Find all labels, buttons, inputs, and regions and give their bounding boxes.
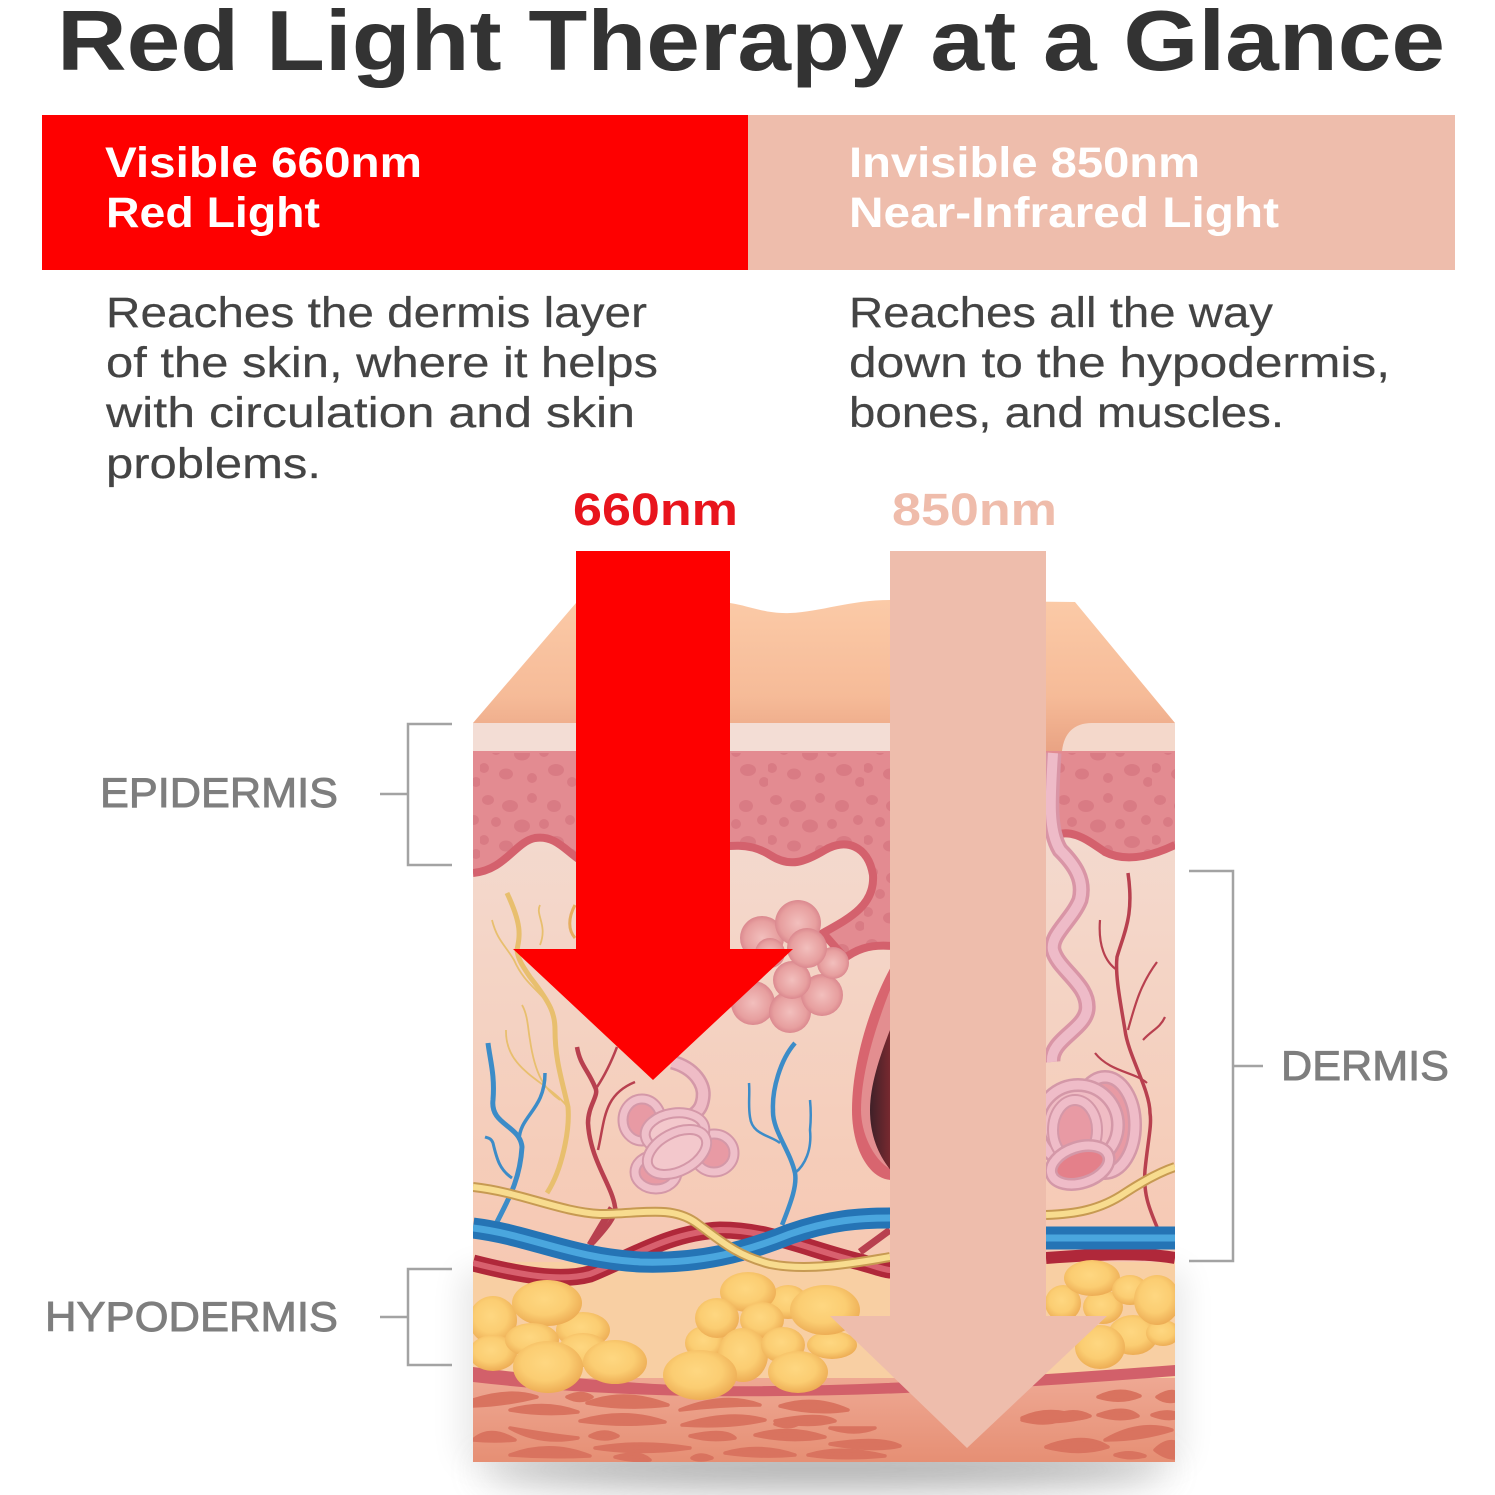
fascia strip bbox=[473, 1365, 1175, 1396]
label: dermis with bracket: DERMIS bbox=[1281, 1042, 1449, 1089]
blue capillary left bbox=[485, 1043, 545, 1222]
label: hypodermis with bracket: HYPODERMIS bbox=[45, 1293, 338, 1340]
label: dermis with bracket bbox=[1189, 871, 1449, 1261]
label: 660nm: 660nm bbox=[573, 484, 738, 535]
text block: 850nm description: down to the hypodermis, bbox=[849, 339, 1390, 387]
text block: 850nm description: bones, and muscles. bbox=[849, 389, 1284, 437]
label: 850nm: 850nm bbox=[892, 484, 1057, 535]
epidermis cell dots bbox=[473, 753, 1175, 958]
blue capillary centre bbox=[749, 1043, 811, 1225]
dermis bbox=[473, 815, 1175, 1275]
panel: 660nm header band: Visible 660nm bbox=[105, 139, 422, 187]
panel: 660nm header band bbox=[42, 115, 748, 270]
artery bbox=[473, 1208, 1175, 1277]
arrow: 850nm near-infrared light bbox=[830, 551, 1107, 1448]
stratum band right bbox=[1062, 723, 1175, 751]
label: epidermis with bracket bbox=[100, 724, 452, 865]
panel: 850nm header band: Invisible 850nm bbox=[849, 139, 1200, 187]
label: epidermis with bracket: EPIDERMIS bbox=[100, 769, 338, 816]
small nerve arc bbox=[570, 905, 575, 938]
label: hypodermis with bracket bbox=[45, 1269, 452, 1365]
block shadow bbox=[462, 1270, 1184, 1490]
hair follicle bbox=[842, 946, 892, 1180]
text block: 660nm description bbox=[105, 289, 658, 488]
nerve main bbox=[473, 1167, 1175, 1267]
sebaceous gland bbox=[731, 900, 849, 1033]
text block: 660nm description: with circulation and skin bbox=[105, 389, 635, 437]
tissue blobs bbox=[473, 1391, 1175, 1461]
sweat gland coil right bbox=[1038, 1077, 1135, 1191]
fat cells centre bbox=[663, 1272, 860, 1400]
lower tissue layer bbox=[473, 1378, 1175, 1462]
stratum corneum band bbox=[473, 723, 890, 751]
sweat duct right bbox=[1051, 753, 1087, 1062]
arrow: 660nm red light bbox=[513, 551, 793, 1080]
fat cells right bbox=[1045, 1260, 1180, 1369]
red capillary left bbox=[577, 1047, 635, 1243]
epidermis layer bbox=[473, 751, 1175, 958]
text block: 850nm description bbox=[849, 289, 1390, 437]
panel: 850nm header band: Near-Infrared Light bbox=[849, 189, 1279, 237]
text block: 660nm description: problems. bbox=[106, 440, 321, 488]
vein bbox=[473, 1218, 1175, 1262]
text block: 850nm description: Reaches all the way bbox=[849, 289, 1274, 337]
fat cells left bbox=[469, 1280, 647, 1393]
text block: 660nm description: of the skin, where it helps bbox=[106, 339, 658, 387]
illustration: skin cross-section bbox=[469, 600, 1180, 1462]
sweat gland coil left bbox=[623, 1062, 734, 1189]
nerve fibres left bbox=[492, 893, 568, 1193]
skin surface top bbox=[473, 600, 1175, 760]
panel: 850nm header band bbox=[748, 115, 1455, 270]
epidermis boundary line bbox=[473, 833, 1175, 958]
panel: 660nm header band: Red Light bbox=[106, 189, 320, 237]
red capillary right bbox=[1095, 873, 1165, 1227]
hypodermis background bbox=[473, 1262, 1175, 1387]
text block: 660nm description: Reaches the dermis layer bbox=[106, 289, 647, 337]
